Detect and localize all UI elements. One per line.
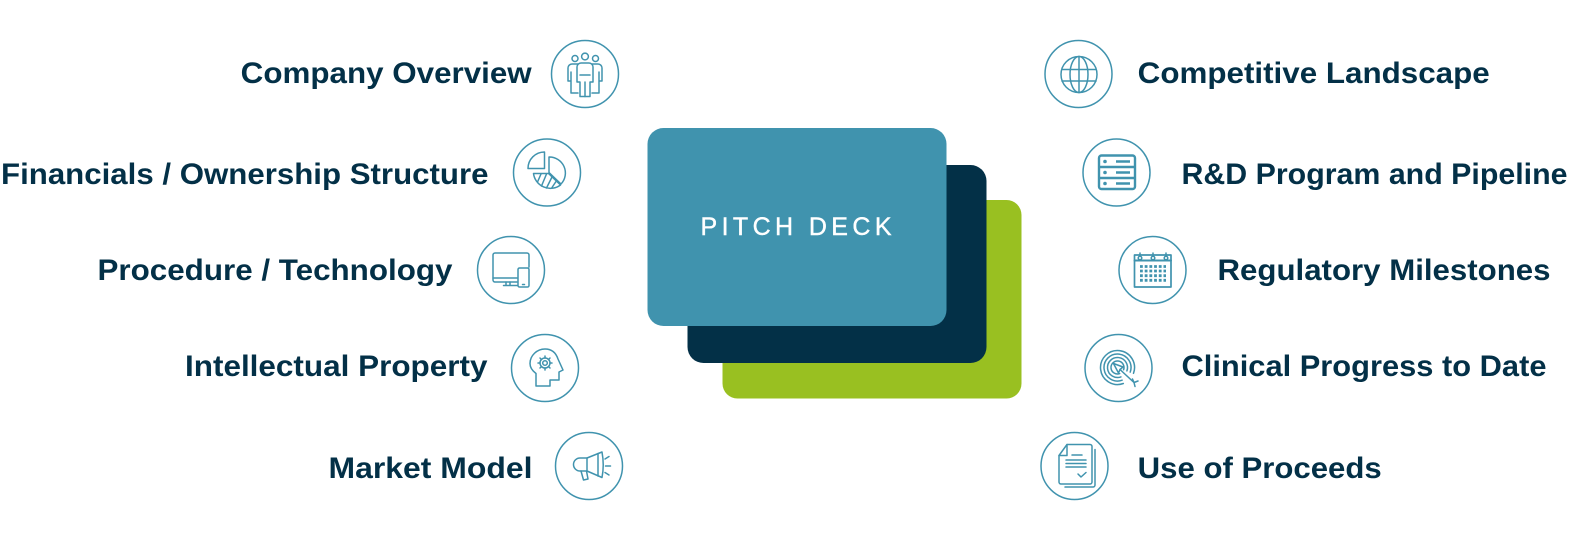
label: Use of Proceeds: Use of Proceeds	[1138, 452, 1382, 485]
icon: megaphone	[556, 432, 622, 500]
label: Financials / Ownership Structure: Financials / Ownership Structure	[1, 158, 488, 191]
icon: monitor and phone	[478, 236, 544, 304]
card: green back	[722, 200, 1022, 398]
label: Intellectual Property: Intellectual Property	[185, 350, 488, 383]
icon: pie chart	[514, 139, 580, 206]
label: Market Model: Market Model	[328, 452, 532, 485]
card: navy middle	[688, 165, 986, 363]
icon: calendar	[1119, 236, 1186, 304]
icon: target with arrow	[1085, 334, 1152, 402]
label: Procedure / Technology: Procedure / Technology	[98, 254, 453, 287]
label: Regulatory Milestones: Regulatory Milestones	[1218, 254, 1550, 287]
label: Clinical Progress to Date: Clinical Progress to Date	[1182, 350, 1546, 383]
icon: server stack	[1083, 139, 1150, 206]
label: R&D Program and Pipeline: R&D Program and Pipeline	[1182, 158, 1568, 191]
icon: head with gear	[512, 334, 578, 402]
icon: globe	[1045, 40, 1112, 108]
card: blue front	[648, 128, 946, 326]
icon: documents	[1041, 432, 1108, 500]
card title: Pitch Deck: PITCH DECK	[700, 213, 892, 241]
label: Company Overview: Company Overview	[241, 57, 532, 90]
label: Competitive Landscape: Competitive Landscape	[1138, 57, 1490, 90]
icon: people group	[552, 40, 618, 108]
